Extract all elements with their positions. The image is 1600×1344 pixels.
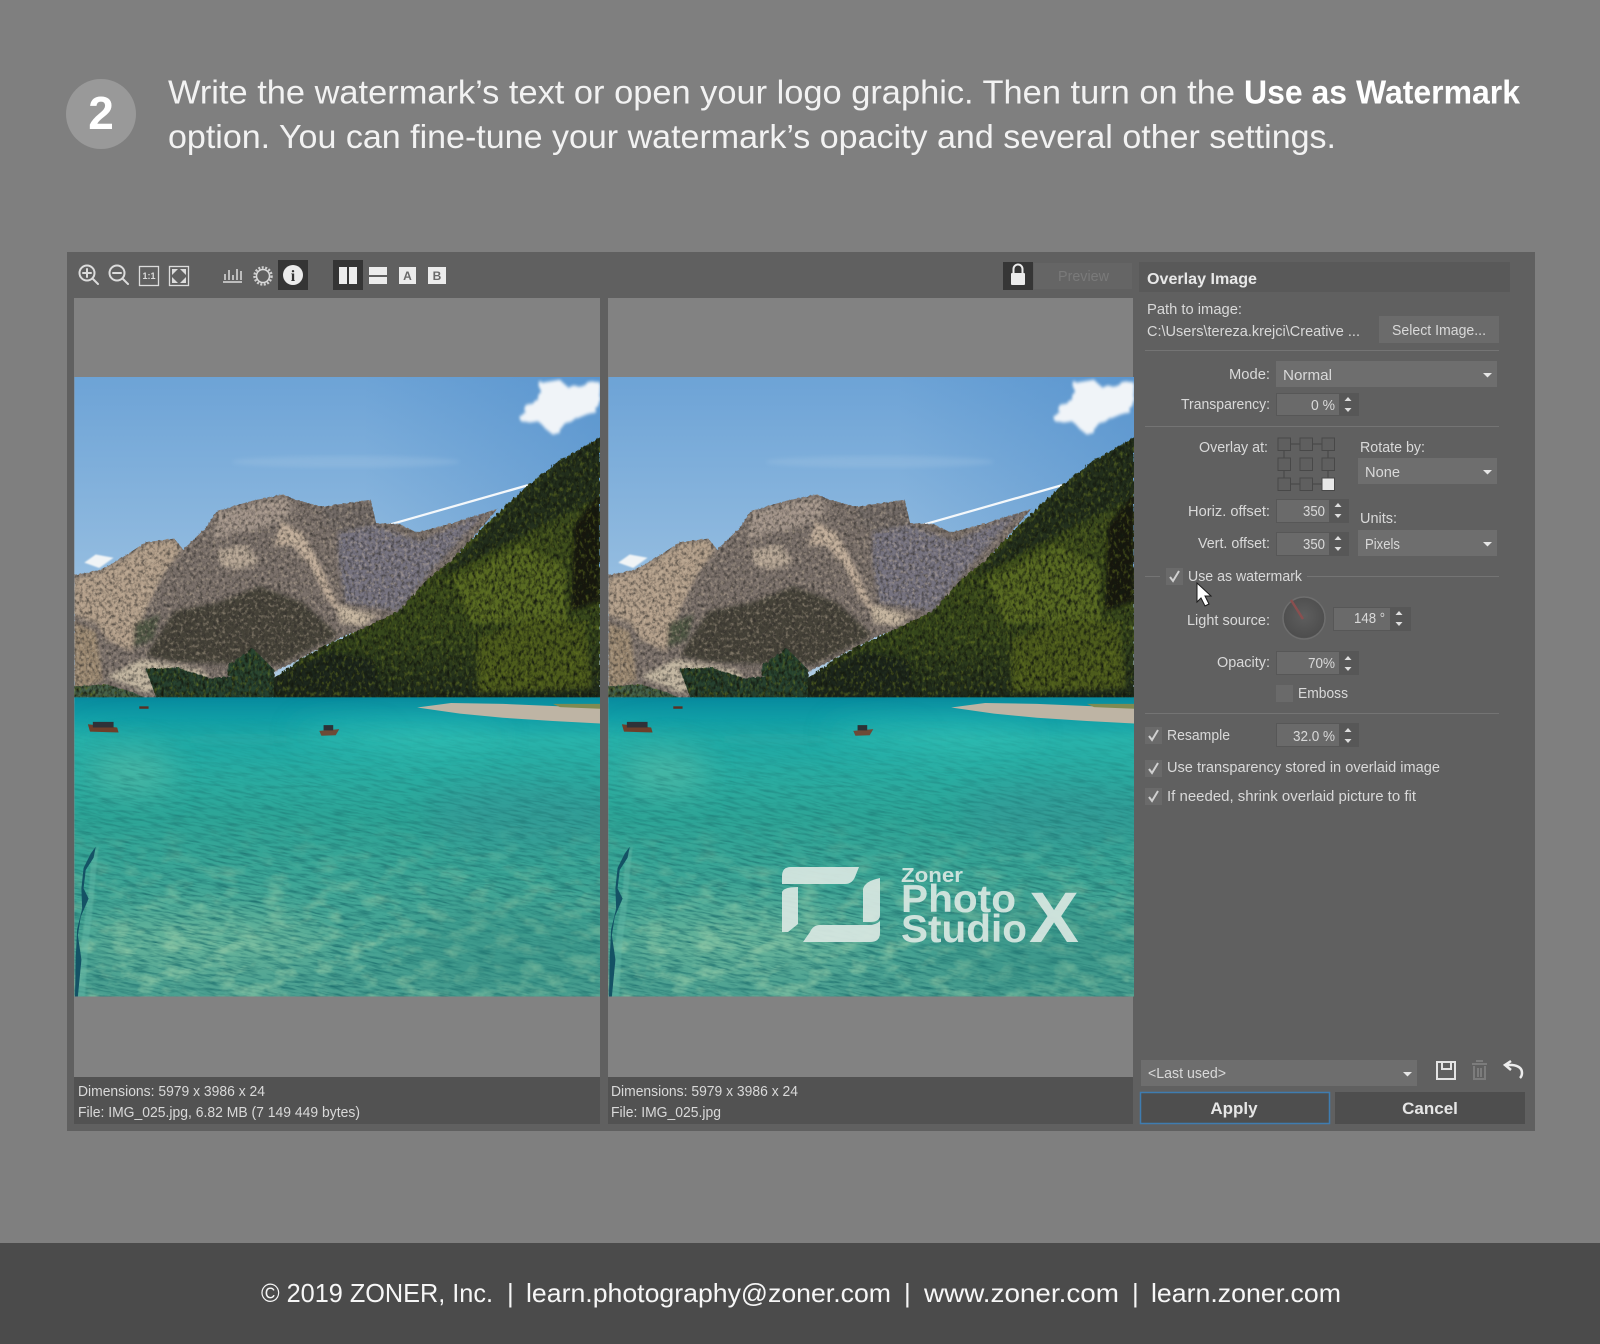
resample option xyxy=(1145,723,1359,747)
watermark logo: Photo xyxy=(901,878,1016,921)
right info bar xyxy=(608,1077,1133,1124)
footer xyxy=(0,1243,1600,1344)
heading text xyxy=(168,74,1521,155)
left info bar xyxy=(74,1077,600,1124)
mode dropdown: Mode: xyxy=(1229,367,1270,383)
toolbar icons: 1:1 xyxy=(142,271,156,281)
opacity field: 70% xyxy=(1308,656,1335,672)
mode dropdown xyxy=(1229,361,1497,387)
heading text: Use as Watermark xyxy=(1244,74,1521,110)
rotate dropdown: Rotate by: xyxy=(1360,440,1425,456)
transparency field xyxy=(1181,393,1359,416)
overlay position grid: Overlay at: xyxy=(1199,440,1268,456)
preview button: Preview xyxy=(1058,269,1110,285)
shrink option: If needed, shrink overlaid picture to fit xyxy=(1167,789,1416,805)
left info bar: File: IMG_025.jpg, 6.82 MB (7 149 449 bytes) xyxy=(78,1105,360,1121)
use as watermark checkbox xyxy=(1145,568,1499,585)
overlay position grid xyxy=(1199,438,1334,490)
right info bar: File: IMG_025.jpg xyxy=(611,1105,721,1121)
path to image: C:\Users\tereza.krejci\Creative ... xyxy=(1147,324,1360,340)
horizontal offset field: 350 xyxy=(1303,504,1325,520)
rotate dropdown: None xyxy=(1365,465,1400,481)
footer: learn.zoner.com xyxy=(1151,1278,1341,1308)
presets dropdown xyxy=(1141,1060,1417,1086)
right preview pane xyxy=(533,298,1223,1120)
icon: delete xyxy=(1472,1061,1487,1079)
step number badge: 2 xyxy=(88,87,114,139)
vertical offset field: Vert. offset: xyxy=(1198,536,1270,552)
info button (active): i xyxy=(291,268,296,285)
horizontal offset field xyxy=(1188,499,1349,523)
cancel button: Cancel xyxy=(1402,1099,1458,1118)
original lake photo xyxy=(0,377,689,1120)
mouse cursor xyxy=(1197,583,1211,606)
transparency option: Use transparency stored in overlaid image xyxy=(1167,760,1440,776)
resample option: 32.0 % xyxy=(1293,729,1335,745)
apply button: Apply xyxy=(1210,1099,1258,1118)
resample option: Resample xyxy=(1167,728,1230,744)
compare view buttons: B xyxy=(433,269,442,283)
apply button xyxy=(1140,1092,1330,1124)
footer: www.zoner.com xyxy=(923,1278,1119,1308)
footer: | xyxy=(904,1278,911,1308)
icon: save xyxy=(1437,1062,1455,1079)
heading text: option. You can fine-tune your watermark’s opacity and several other settings. xyxy=(168,118,1336,155)
use as watermark checkbox: Use as watermark xyxy=(1188,569,1303,585)
transparency field: Transparency: xyxy=(1181,397,1270,413)
toolbar icons xyxy=(80,266,272,286)
path to image: Path to image: xyxy=(1147,302,1242,318)
info button (active) xyxy=(278,260,308,290)
watermark logo: X xyxy=(1029,879,1079,958)
mode dropdown: Normal xyxy=(1283,368,1332,384)
right info bar: Dimensions: 5979 x 3986 x 24 xyxy=(611,1084,798,1100)
compare view buttons xyxy=(333,260,446,290)
left preview pane xyxy=(0,298,689,1120)
panel header xyxy=(1139,262,1510,292)
light source dial xyxy=(1187,597,1411,639)
light source dial: 148 ° xyxy=(1354,611,1385,627)
footer: © 2019 ZONER, Inc. xyxy=(261,1278,493,1308)
opacity field: Opacity: xyxy=(1217,655,1270,671)
rotate dropdown xyxy=(1358,440,1497,484)
cancel button xyxy=(1335,1092,1525,1124)
panel: overlay image settings xyxy=(1139,262,1525,1124)
watermark logo: Studio xyxy=(901,908,1027,951)
icon: undo xyxy=(1505,1061,1522,1078)
watermark logo xyxy=(782,865,1079,958)
presets dropdown: <Last used> xyxy=(1148,1066,1226,1082)
units dropdown: Units: xyxy=(1360,511,1397,527)
watermarked lake photo xyxy=(533,377,1223,1120)
step number badge xyxy=(66,79,136,149)
emboss checkbox: Emboss xyxy=(1298,686,1348,702)
application window xyxy=(0,252,1535,1131)
watermark logo: Zoner xyxy=(901,865,963,887)
vertical offset field xyxy=(1198,532,1349,556)
units dropdown xyxy=(1358,511,1497,556)
lock button xyxy=(1003,262,1033,290)
preview button xyxy=(1034,263,1132,289)
transparency field: 0 % xyxy=(1311,398,1335,414)
panel header: Overlay Image xyxy=(1147,271,1257,288)
footer: learn.photography@zoner.com xyxy=(526,1278,891,1308)
opacity field xyxy=(1217,651,1359,675)
heading text: Write the watermark’s text or open your logo graphic. Then turn on the xyxy=(168,74,1235,110)
path to image xyxy=(1147,302,1499,343)
units dropdown: Pixels xyxy=(1365,537,1400,553)
light source dial: Light source: xyxy=(1187,613,1270,629)
emboss checkbox xyxy=(1276,685,1348,702)
footer: | xyxy=(1132,1278,1139,1308)
horizontal offset field: Horiz. offset: xyxy=(1188,504,1270,520)
left info bar: Dimensions: 5979 x 3986 x 24 xyxy=(78,1084,265,1100)
footer: | xyxy=(507,1278,514,1308)
compare view buttons: A xyxy=(403,269,412,283)
vertical offset field: 350 xyxy=(1303,537,1325,553)
path to image: Select Image... xyxy=(1392,323,1486,339)
